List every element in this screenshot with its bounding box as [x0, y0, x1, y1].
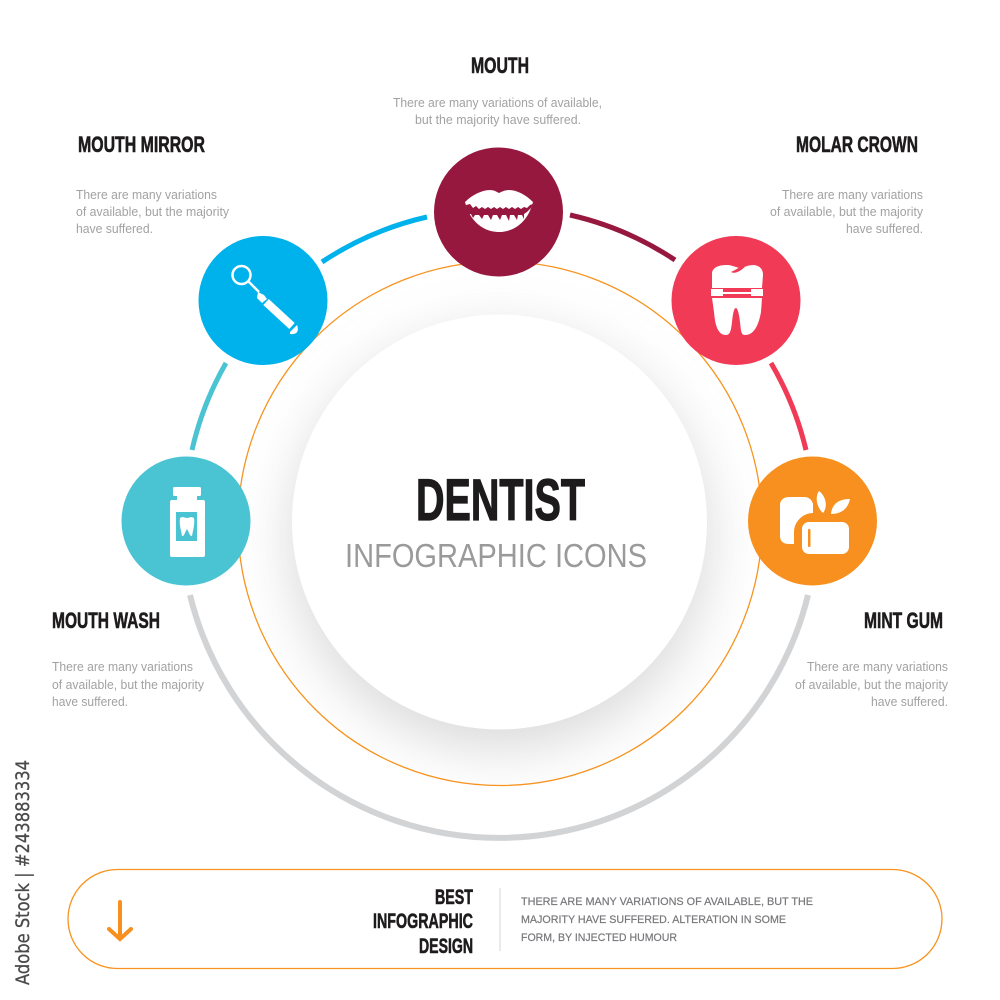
icon: molar with band: [711, 265, 763, 335]
node: molar crown: [672, 236, 800, 365]
banner heading: [373, 886, 473, 958]
center title: DENTIST: [416, 468, 585, 533]
label: mouth mirror: [76, 132, 230, 236]
label: mint gum: of available, but the majority: [795, 678, 949, 692]
bottom banner: [68, 870, 942, 968]
label: mouth: but the majority have suffered.: [415, 113, 581, 127]
center white disc: [292, 314, 707, 730]
banner heading: INFOGRAPHIC: [373, 910, 473, 933]
label: molar crown: MOLAR CROWN: [796, 132, 918, 157]
banner heading: BEST: [435, 886, 473, 909]
node: mouth mirror: [198, 236, 328, 365]
label: molar crown: of available, but the majority: [770, 205, 924, 219]
label: mouth wash: MOUTH WASH: [52, 608, 160, 633]
banner text: FORM, BY INJECTED HUMOUR: [521, 932, 677, 944]
center subtitle: INFOGRAPHIC ICONS: [345, 537, 647, 574]
label: mouth wash: of available, but the majority: [52, 678, 205, 692]
orange inner ring: [238, 262, 762, 786]
label: mouth: [393, 53, 602, 127]
label: molar crown: have suffered.: [846, 222, 923, 236]
label: mouth wash: [52, 608, 205, 709]
icon: mouthwash bottle: [170, 487, 205, 557]
label: mouth mirror: MOUTH MIRROR: [78, 132, 205, 157]
label: molar crown: [770, 132, 924, 236]
node: mouth wash: [122, 456, 250, 586]
label: mouth: There are many variations of available,: [393, 96, 602, 110]
label: mouth mirror: of available, but the majority: [76, 205, 230, 219]
icon: down arrow: [109, 902, 131, 939]
label: mint gum: There are many variations: [807, 660, 948, 674]
label: mint gum: [795, 608, 949, 709]
banner text: [521, 896, 813, 944]
icon: gum pieces with leaves: [780, 491, 850, 554]
label: molar crown: There are many variations: [782, 188, 923, 202]
banner heading: DESIGN: [419, 935, 473, 958]
icon: dental mirror: [232, 266, 298, 334]
banner text: MAJORITY HAVE SUFFERED. ALTERATION IN SOME: [521, 914, 786, 926]
label: mint gum: MINT GUM: [864, 608, 943, 633]
icon: lips with teeth: [465, 190, 533, 232]
center title: [345, 468, 647, 574]
label: mouth mirror: There are many variations: [76, 188, 217, 202]
banner text: THERE ARE MANY VARIATIONS OF AVAILABLE, BUT THE: [521, 896, 813, 908]
node: mouth: [434, 148, 563, 276]
node: mint gum: [748, 456, 877, 586]
label: mouth mirror: have suffered.: [76, 222, 153, 236]
label: mouth wash: have suffered.: [52, 695, 128, 709]
label: mouth wash: There are many variations: [52, 660, 193, 674]
outer ring arcs: [190, 215, 808, 838]
center shadow: [292, 332, 708, 748]
vertical stock credit: Adobe Stock | #243883334: [12, 760, 34, 985]
label: mouth: MOUTH: [471, 53, 529, 78]
label: mint gum: have suffered.: [871, 695, 948, 709]
